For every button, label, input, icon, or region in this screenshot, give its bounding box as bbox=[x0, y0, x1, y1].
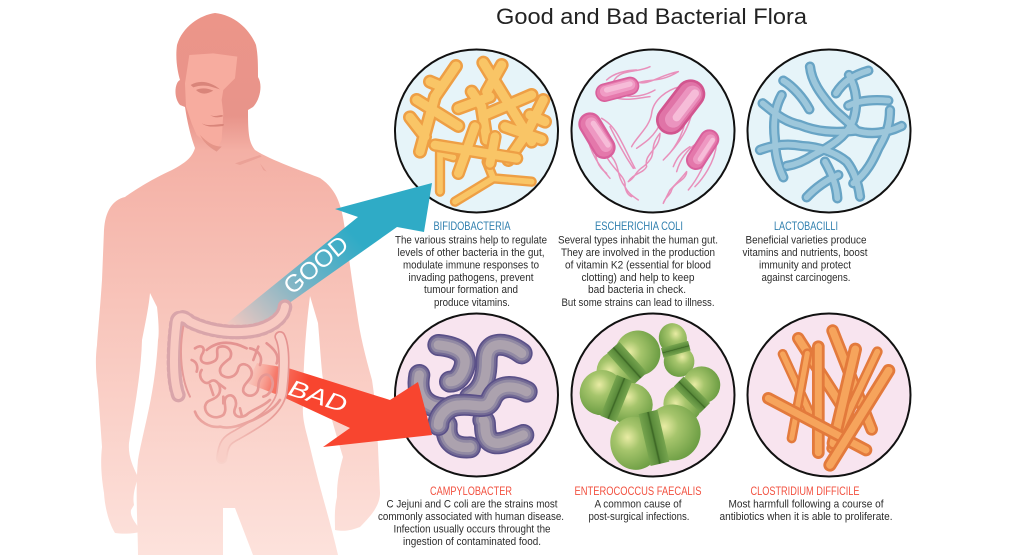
label: Campylobacter bbox=[378, 484, 564, 548]
label: Lactobacilli: Beneficial varieties produce bbox=[746, 234, 866, 246]
label: Clostridium difficile: Most harmfull following a course of bbox=[728, 498, 884, 510]
circle: Lactobacilli bbox=[748, 50, 910, 212]
face highlight bbox=[185, 53, 237, 151]
label: Escherichia coli: But some strains can lead to illness. bbox=[562, 297, 714, 309]
illustration: intestines bbox=[174, 307, 285, 458]
label: Escherichia coli: clotting) and help to keep bbox=[582, 272, 694, 284]
circle: Clostridium difficile bbox=[748, 314, 910, 476]
circle: Enterococcus faecalis bbox=[572, 314, 734, 476]
face features bbox=[191, 82, 267, 172]
label: Enterococcus faecalis: ENTEROCOCCUS FAECALIS bbox=[574, 484, 702, 498]
label: Bifidobacteria: invading pathogens, prevent bbox=[408, 272, 534, 284]
label: Escherichia coli bbox=[558, 219, 718, 309]
label: Campylobacter: ingestion of contaminated food. bbox=[403, 536, 541, 548]
label: Clostridium difficile: CLOSTRIDIUM DIFFICILE bbox=[750, 484, 860, 498]
label: Lactobacilli: immunity and protect bbox=[759, 260, 851, 272]
label: Bifidobacteria bbox=[395, 219, 547, 309]
label: Bifidobacteria: BIFIDOBACTERIA bbox=[434, 219, 510, 233]
label: Campylobacter: C Jejuni and C coli are the strains most bbox=[386, 498, 558, 510]
label: Lactobacilli bbox=[742, 219, 868, 284]
label: Bifidobacteria: tumour formation and bbox=[424, 284, 518, 296]
flagella bbox=[587, 67, 717, 203]
label: Enterococcus faecalis: A common cause of bbox=[594, 498, 682, 510]
label: Escherichia coli: bad bacteria in check. bbox=[588, 284, 686, 296]
circle: Bifidobacteria bbox=[395, 50, 558, 212]
label: Lactobacilli: LACTOBACILLI bbox=[774, 219, 838, 233]
circle: Escherichia coli bbox=[572, 50, 734, 212]
arrow: good: GOOD bbox=[279, 231, 354, 300]
label: Escherichia coli: Several types inhabit the human gut. bbox=[558, 234, 718, 246]
title: Good and Bad Bacterial Flora bbox=[496, 4, 808, 29]
label: Enterococcus faecalis: post-surgical infections. bbox=[588, 511, 690, 523]
label: Bifidobacteria: The various strains help to regulate bbox=[395, 234, 547, 246]
label: Bifidobacteria: levels of other bacteria in the gut, bbox=[398, 247, 544, 259]
label: Campylobacter: CAMPYLOBACTER bbox=[430, 484, 512, 498]
arrow: bad bbox=[247, 363, 432, 447]
label: Clostridium difficile: antibiotics when it is able to proliferate. bbox=[720, 511, 892, 523]
large intestine bbox=[174, 307, 285, 458]
small intestine bbox=[192, 343, 280, 428]
circle: Campylobacter bbox=[395, 314, 558, 476]
label: Enterococcus faecalis bbox=[574, 484, 702, 523]
rods bbox=[590, 84, 713, 160]
label: Lactobacilli: against carcinogens. bbox=[762, 272, 850, 284]
arrow: bad: BAD bbox=[285, 374, 351, 418]
label: Lactobacilli: vitamins and nutrients, boost bbox=[742, 247, 868, 259]
label: Bifidobacteria: produce vitamins. bbox=[434, 297, 510, 309]
label: Escherichia coli: They are involved in the production bbox=[561, 247, 715, 259]
label: Campylobacter: Infection usually occurs throught the bbox=[394, 524, 550, 536]
label: Escherichia coli: of vitamin K2 (essential for blood bbox=[565, 260, 711, 272]
figure: male body silhouette bbox=[96, 13, 380, 555]
label: Bifidobacteria: modulate immune responses to bbox=[403, 260, 539, 272]
label: Campylobacter: commonly associated with human disease. bbox=[378, 511, 564, 523]
label: Clostridium difficile bbox=[720, 484, 892, 523]
arrow: good bbox=[227, 183, 432, 333]
label: Escherichia coli: ESCHERICHIA COLI bbox=[595, 219, 683, 233]
